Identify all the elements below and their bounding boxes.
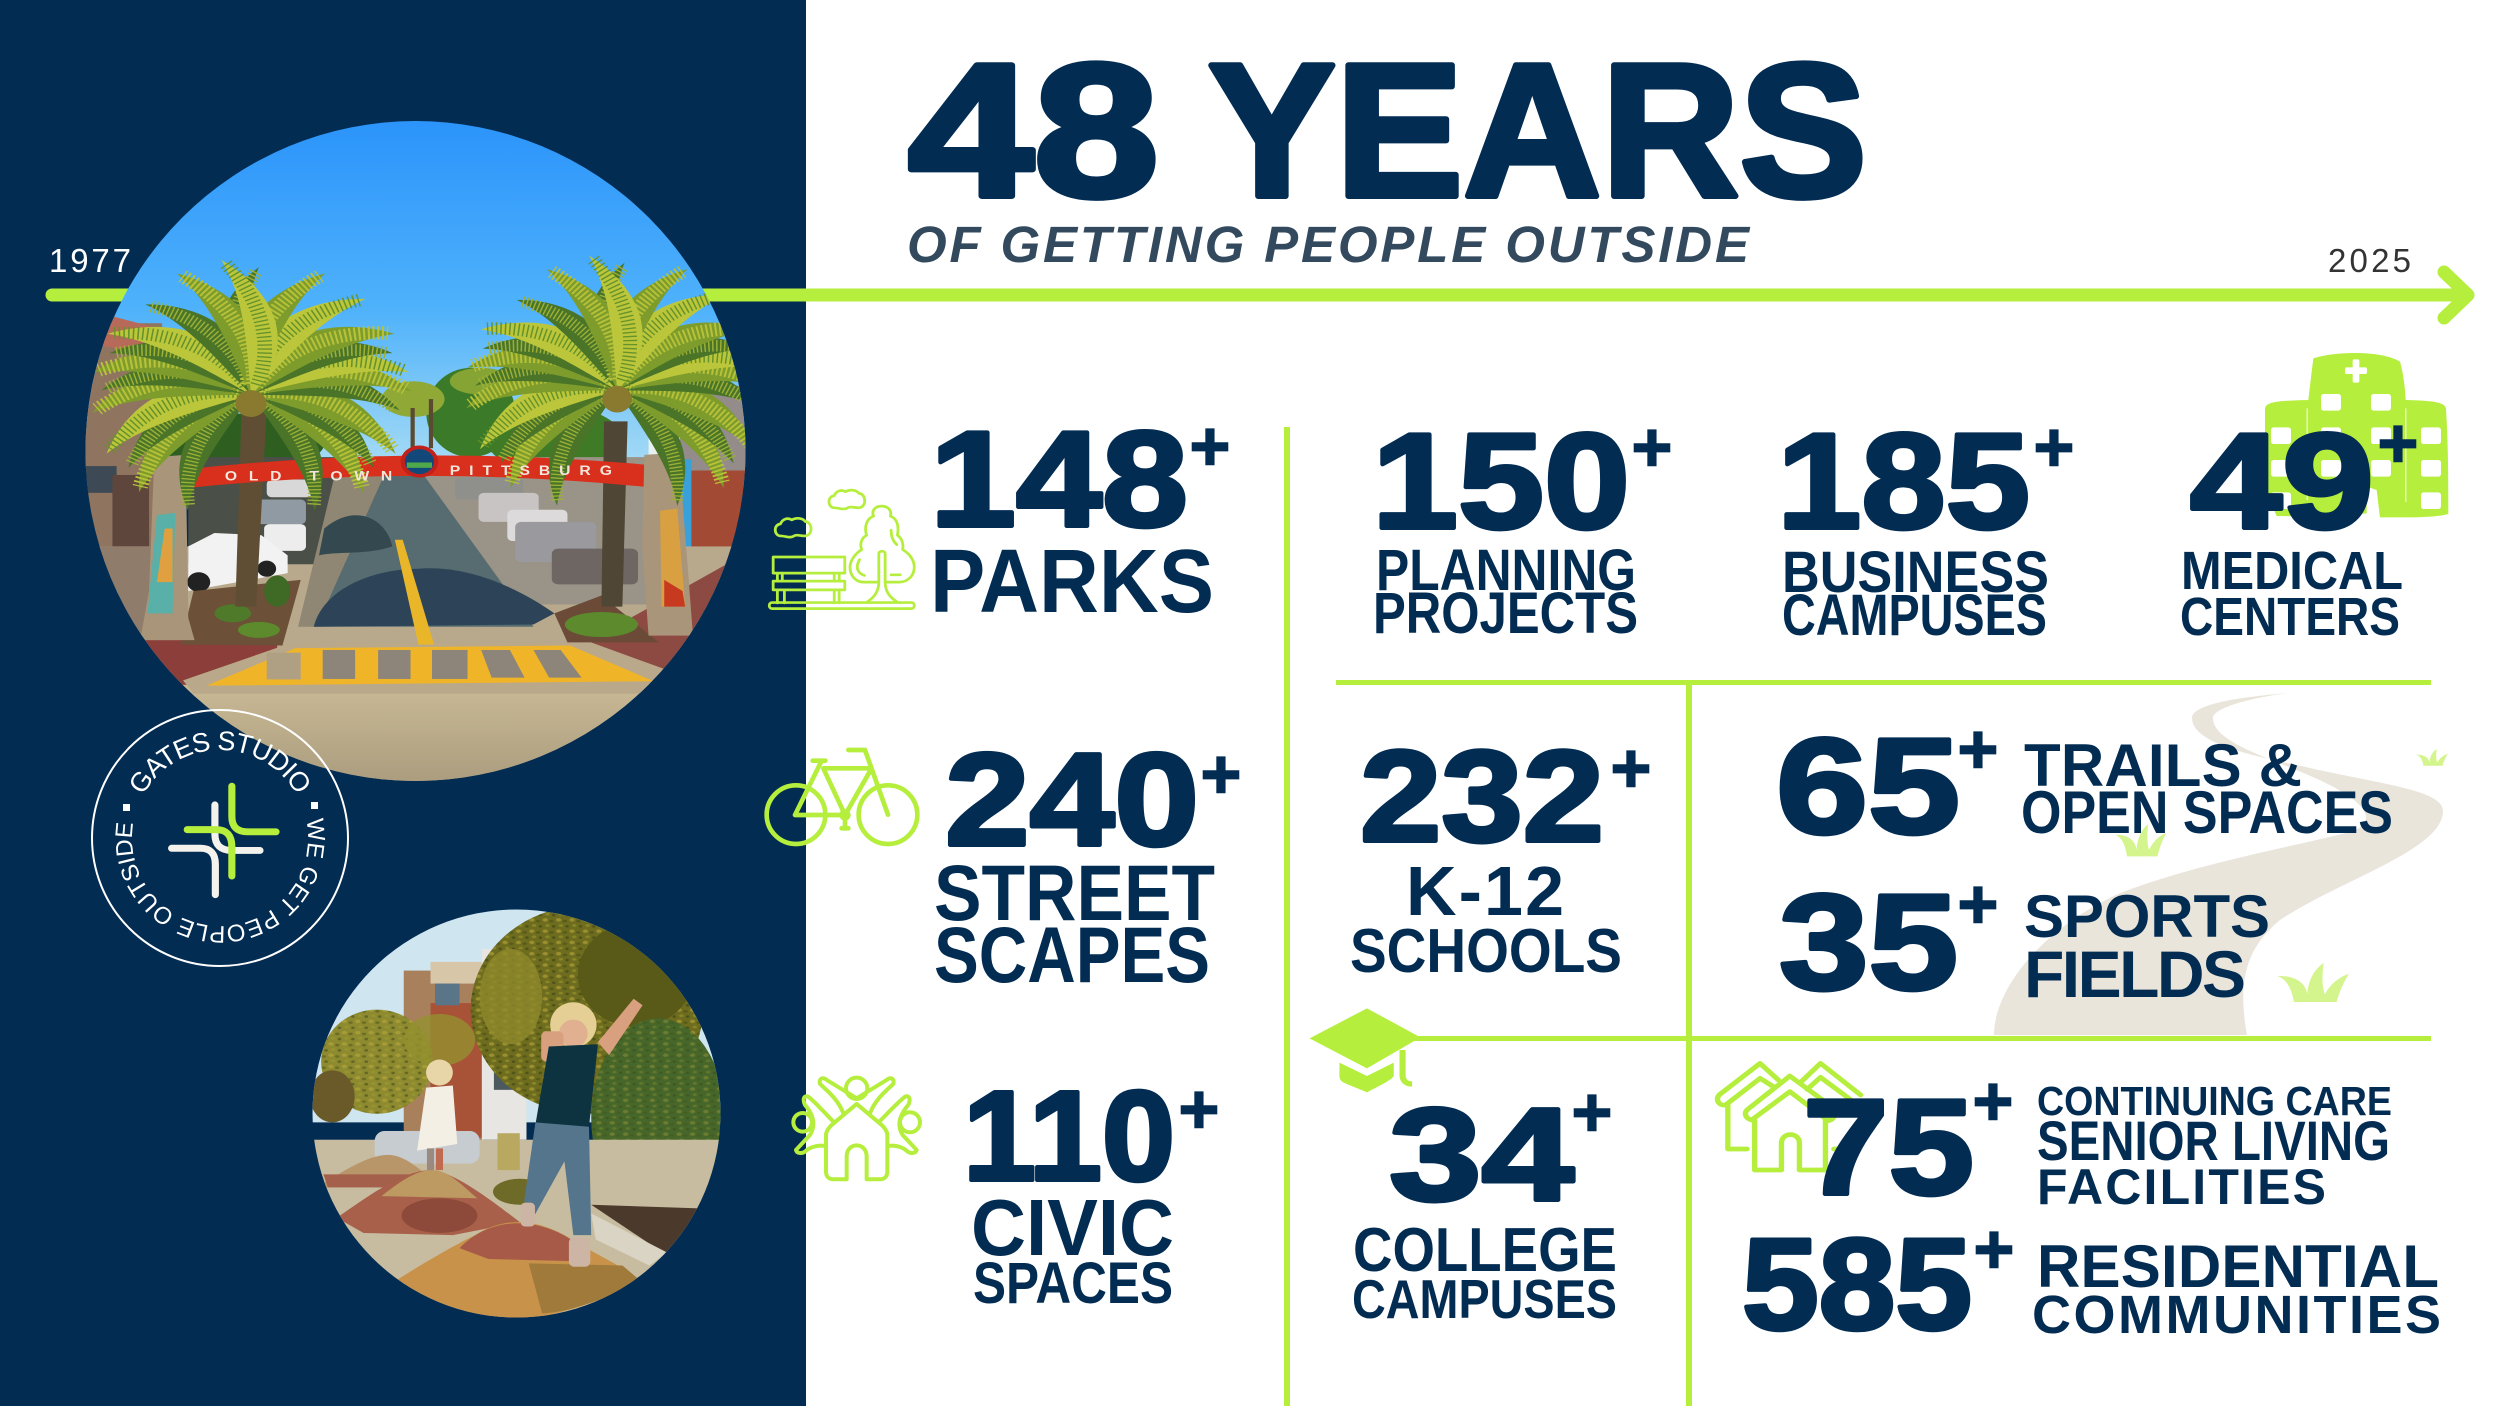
label: MEDICAL: [2181, 541, 2403, 601]
plus: +: [1572, 1073, 1612, 1151]
plus: +: [2378, 404, 2418, 482]
ground and road: [100, 457, 732, 781]
sky: [310, 906, 725, 1122]
icon: houses: [1718, 1063, 1861, 1170]
label line 2: CAMPUSES: [1782, 583, 2047, 648]
child in white dress: [417, 1059, 457, 1170]
label: K-12: [1406, 852, 1564, 930]
label line 2: SENIOR LIVING: [2037, 1109, 2390, 1172]
stat: 35 sports fields: [1779, 865, 2270, 1018]
label line 2: CENTERS: [2180, 587, 2400, 647]
label: STREET: [934, 848, 1215, 937]
stat: 150 planning projects: [1372, 405, 1672, 646]
label line 2: COMMUNITIES: [2032, 1285, 2441, 1345]
distant trees: [169, 368, 612, 458]
label line 2: CAMPUSES: [1352, 1268, 1617, 1330]
number: 148: [930, 403, 1188, 555]
stat: 65 trails and open spaces: [1776, 710, 2393, 862]
foliage: [312, 912, 720, 1186]
icon: graduation cap: [1310, 1008, 1421, 1092]
number: 49: [2190, 405, 2374, 557]
label line 2: PROJECTS: [1373, 581, 1638, 646]
label line 2: FIELDS: [2024, 937, 2246, 1011]
label: CONTINUING CARE: [2037, 1078, 2392, 1124]
plus: +: [1179, 1070, 1219, 1148]
plus: +: [1958, 710, 1998, 788]
number: 240: [945, 726, 1199, 873]
arch gateway: [140, 446, 693, 640]
logo cross mark: [172, 786, 276, 895]
number: 150: [1372, 405, 1630, 557]
plus: +: [1974, 1210, 2014, 1288]
arch sign lettering: [226, 466, 611, 480]
timeline arrow: [52, 272, 2468, 318]
icon: hospital: [2265, 353, 2448, 517]
icon: bicycle: [767, 750, 917, 844]
number: 110: [963, 1065, 1175, 1208]
label: SPORTS: [2024, 883, 2270, 950]
stat: 585 residential communities: [1742, 1210, 2441, 1357]
stat: 232 K-12 schools: [1350, 723, 1651, 986]
plus: +: [2034, 408, 2074, 486]
stat: 75 continuing care senior living: [1803, 1062, 2392, 1223]
plus: +: [1632, 408, 1672, 486]
photo: children on playground mounds: [310, 906, 725, 1322]
badge text: WE GET PEOPLE OUTSIDE: [115, 818, 326, 943]
plus: +: [1611, 729, 1651, 807]
palm trunks: [235, 408, 628, 607]
label: RESIDENTIAL: [2037, 1233, 2439, 1300]
stat: 240 street scapes: [934, 726, 1241, 999]
building: [404, 949, 526, 1144]
title word: YEARS: [1208, 25, 1867, 237]
stat: 34 college campuses: [1352, 1073, 1617, 1330]
stat: 185 business campuses: [1777, 405, 2074, 648]
arch sign lettering: PITTSBURG: [450, 464, 612, 479]
badge text: [115, 731, 326, 943]
number: 75: [1803, 1071, 1974, 1223]
grid dividers: [1284, 427, 2431, 1406]
title: [908, 25, 1867, 237]
label: COLLEGE: [1353, 1216, 1617, 1285]
sky: [78, 113, 758, 471]
play mounds: [323, 1155, 640, 1322]
label: PARKS: [930, 532, 1214, 632]
arch sign lettering: OLD TOWN: [225, 469, 392, 484]
ground: [310, 1131, 725, 1322]
number: 232: [1360, 723, 1604, 869]
stat: 110 civic spaces: [963, 1065, 1219, 1316]
end year 2025: 2025: [2328, 242, 2411, 279]
label line 2: SCAPES: [934, 910, 1210, 999]
subtitle: OF GETTING PEOPLE OUTSIDE: [907, 216, 1751, 273]
logo badge: Gates Studio: [91, 709, 349, 967]
crosswalk: [207, 646, 654, 686]
trail illustration: [1994, 693, 2448, 1035]
icon: park bench and tree: [769, 490, 914, 609]
label line 2: OPEN SPACES: [2021, 779, 2393, 846]
palm trees: [90, 252, 770, 510]
number: 585: [1742, 1211, 1972, 1357]
number: 65: [1776, 710, 1960, 862]
label: BUSINESS: [1782, 540, 2049, 605]
label: TRAILS &: [2024, 732, 2302, 799]
number: 34: [1389, 1081, 1574, 1228]
plus: +: [1190, 407, 1230, 485]
number: 185: [1777, 405, 2030, 557]
start year 1977: 1977: [49, 242, 131, 279]
cars: [187, 477, 638, 592]
child jumping: [521, 999, 643, 1267]
label line 3: FACILITIES: [2037, 1159, 2326, 1215]
planters: [180, 575, 659, 646]
icon: house with people: [793, 1078, 920, 1179]
badge text: GATES STUDIO: [131, 731, 309, 792]
plus: +: [1973, 1062, 2013, 1140]
plus: +: [1958, 865, 1998, 943]
label: PLANNING: [1376, 538, 1636, 603]
navy side panel: [0, 0, 806, 1406]
stat: 148 parks: [930, 403, 1230, 632]
label line 2: SCHOOLS: [1350, 917, 1622, 986]
title number: 48: [908, 25, 1159, 237]
photo: Old Town Pittsburg street arch: [63, 113, 770, 792]
label: CIVIC: [971, 1183, 1174, 1272]
stat: 49 medical centers: [2180, 404, 2418, 647]
label line 2: SPACES: [973, 1251, 1173, 1316]
buildings: [78, 314, 764, 560]
plus: +: [1201, 735, 1241, 813]
number: 35: [1779, 866, 1958, 1018]
